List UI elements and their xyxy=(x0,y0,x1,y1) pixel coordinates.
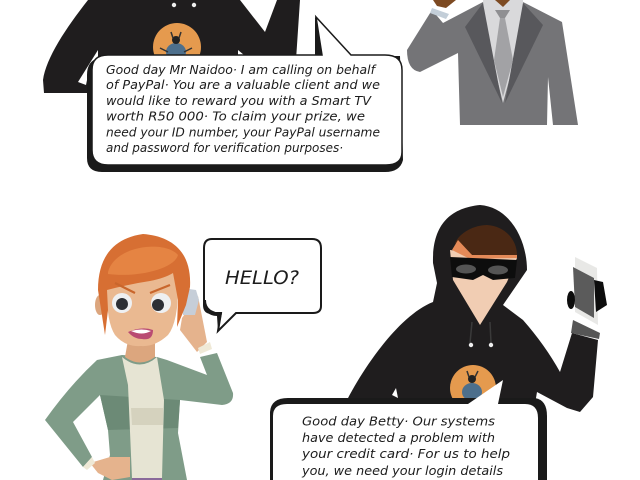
message text: would like to reward you with a Smart TV xyxy=(106,94,372,108)
eyes xyxy=(112,293,132,313)
hair xyxy=(98,234,190,335)
message text: Good day Mr Naidoo· I am calling on behalf xyxy=(106,63,377,77)
message text xyxy=(301,414,510,478)
bubble text: HELLO? xyxy=(225,267,299,289)
glove xyxy=(594,280,607,312)
neck xyxy=(125,340,155,362)
raised hand and phone xyxy=(180,296,207,352)
mouth xyxy=(128,328,153,339)
speech bubble: credit card scam message xyxy=(270,380,547,480)
badge xyxy=(450,365,496,411)
white gap under arm xyxy=(392,388,398,398)
scammer top: hoodie figure xyxy=(43,0,300,93)
speech bubble: PayPal scam message xyxy=(87,16,403,172)
woman on the phone xyxy=(45,234,233,480)
face xyxy=(107,270,178,346)
message text: Good day Betty· Our systems xyxy=(302,414,495,428)
speech bubble: HELLO? xyxy=(204,239,321,331)
phone xyxy=(575,257,598,325)
mask xyxy=(450,257,517,280)
drawstrings xyxy=(470,322,491,343)
jacket xyxy=(45,353,233,480)
top xyxy=(122,357,164,478)
message text: have detected a problem with xyxy=(302,431,495,445)
message text: and password for verification purposes· xyxy=(106,141,343,155)
message text: need your ID number, your PayPal username xyxy=(106,126,380,140)
face xyxy=(450,250,517,325)
message text: of PayPal· You are a valuable client and we xyxy=(106,78,380,92)
message text: you, we need your login details xyxy=(301,464,503,478)
message text xyxy=(106,63,380,155)
hoodie body xyxy=(347,205,598,412)
businessman in grey suit xyxy=(407,0,578,125)
ear xyxy=(95,295,105,315)
message text: your credit card· For us to help xyxy=(301,447,510,461)
cuff xyxy=(571,320,600,339)
message text: worth R50 000· To claim your prize, we xyxy=(106,110,365,124)
scammer bottom: hooded figure with phone xyxy=(347,205,607,412)
waist hand and cuff xyxy=(90,457,130,480)
